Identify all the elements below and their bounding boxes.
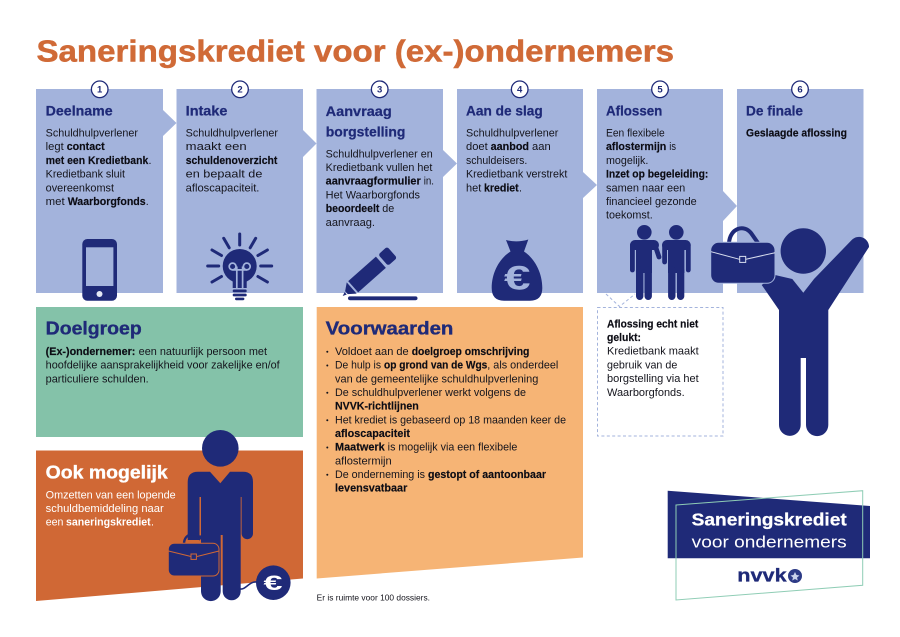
list: conditions: van de gemeentelijke schuldhulpverlening — [335, 373, 538, 385]
list: conditions: NVVK-richtlijnen — [335, 401, 419, 413]
icon: cheering person with briefcase — [711, 228, 869, 436]
text: step 3 description: Kredietbank vullen het — [326, 162, 432, 174]
panel: step 2 Intake — [176, 81, 316, 300]
text: step 4 description: aan — [532, 141, 551, 153]
text: Ook mogelijk description: Omzetten van een lopende — [46, 489, 176, 501]
text: step 2 description: Schuldhulpverlener — [186, 128, 278, 140]
callout: aflossing echt niet gelukt: gebruik van de — [607, 359, 677, 371]
panel: step 1 Deelname — [36, 81, 176, 301]
heading: De finale: De finale — [746, 103, 803, 119]
list: conditions: De schuldhulpverlener werkt volgens de — [335, 387, 526, 399]
text: step 3 description: Schuldhulpverlener en — [326, 148, 433, 160]
list: conditions: Het krediet is gebaseerd op 18 maanden keer de — [335, 414, 566, 426]
icon: smartphone — [82, 239, 117, 301]
heading: Aanvraag borgstelling: Aanvraag — [326, 103, 392, 119]
icon: money bag — [492, 240, 542, 301]
list: conditions: Voldoet aan de — [335, 346, 409, 358]
list: conditions: aflostermijn — [335, 455, 392, 467]
step number 2: 2 — [237, 85, 243, 96]
text: step 5 description: financieel gezonde — [606, 196, 697, 208]
text: step 5 description: Inzet op begeleiding: — [606, 169, 708, 181]
list: conditions — [326, 346, 566, 495]
text: Ook mogelijk description: . — [151, 517, 154, 529]
step number 6: 6 — [797, 85, 803, 96]
text: Doelgroep description: (Ex-)ondernemer: — [46, 346, 135, 358]
text: Doelgroep description: hoofdelijke aansprakelijkheid voor zakelijke en/of — [46, 360, 280, 372]
callout: aflossing echt niet gelukt: gelukt: — [607, 332, 641, 344]
text: step 4 description: het — [466, 182, 481, 194]
text: step 3 description: aanvraag. — [326, 217, 375, 229]
callout: aflossing echt niet gelukt: Kredietbank maakt — [607, 346, 699, 358]
step number 2 — [232, 81, 248, 98]
text: Ook mogelijk description — [46, 489, 176, 529]
panel: Voorwaarden — [317, 307, 583, 578]
step number 4 — [511, 81, 528, 98]
heading: Aanvraag borgstelling — [326, 103, 405, 140]
text: step 1 description: . — [148, 155, 151, 167]
panel: Ook mogelijk — [36, 430, 303, 601]
text: Ook mogelijk description: een — [46, 517, 63, 529]
panel: step 3 Aanvraag borgstelling — [316, 81, 457, 302]
callout: aflossing echt niet gelukt: borgstelling via het — [607, 373, 699, 385]
heading: Aan de slag: Aan de slag — [466, 103, 543, 119]
text: step 5 description: Een flexibele — [606, 128, 665, 140]
heading: Intake: Intake — [186, 103, 228, 119]
text: step 1 description: met — [46, 196, 65, 208]
text: step 4 description: Kredietbank verstrekt — [466, 169, 567, 181]
list: conditions: De onderneming is — [335, 469, 425, 481]
heading: Ook mogelijk: Ook mogelijk — [46, 461, 168, 482]
list: conditions: gestopt of aantoonbaar — [428, 469, 546, 481]
footnote: Er is ruimte voor 100 dossiers. — [317, 593, 430, 603]
icon: raised briefcase — [711, 228, 775, 283]
text: step 2 description: schuldenoverzicht — [186, 155, 278, 167]
text: step 3 description — [326, 148, 434, 229]
list: conditions: op grond van de Wgs — [384, 360, 487, 372]
text: step 1 description: contact — [67, 141, 105, 153]
text: Ook mogelijk description: saneringskrediet — [66, 517, 151, 529]
step number 6 — [792, 81, 808, 98]
text: Ook mogelijk description: schuldbemiddeling naar — [46, 503, 164, 515]
heading: Voorwaarden: Voorwaarden — [326, 317, 453, 338]
icon: money bag: € — [504, 260, 531, 298]
callout: aflossing echt niet gelukt: Aflossing echt niet — [607, 318, 699, 330]
icon: briefcase — [168, 534, 219, 576]
title: Saneringskrediet voor (ex-)ondernemers — [36, 35, 674, 69]
text: step 5 description: is — [669, 141, 676, 153]
text: step 1 description: legt — [46, 141, 64, 153]
text: Doelgroep description: een natuurlijk persoon met — [139, 346, 267, 358]
text: step 3 description: aanvraagformulier — [326, 176, 421, 188]
logo: Saneringskrediet voor ondernemers nvvk — [668, 491, 870, 600]
icon: chain and euro ball: € — [264, 572, 283, 595]
text: step 5 description: mogelijk. — [606, 155, 648, 167]
logo: Saneringskrediet voor ondernemers nvvk: nvvk — [737, 565, 787, 586]
text: step 2 description: afloscapaciteit. — [186, 182, 259, 194]
text: step 3 description: in. — [424, 176, 434, 188]
text: Doelgroep description: particuliere schulden. — [46, 373, 149, 385]
list: conditions: doelgroep omschrijving — [412, 346, 529, 358]
heading: Doelgroep: Doelgroep — [46, 317, 142, 338]
list: conditions: Maatwerk — [335, 442, 385, 454]
text: step 1 description — [46, 128, 151, 208]
text: step 2 description: en bepaalt de — [186, 169, 262, 181]
text: step 6 description: Geslaagde aflossing — [746, 128, 847, 140]
text: step 4 description: aanbod — [491, 141, 529, 153]
text: step 1 description: . — [146, 196, 149, 208]
text: step 1 description: Kredietbank sluit — [46, 169, 125, 181]
text: Doelgroep description — [46, 346, 280, 385]
logo: Saneringskrediet voor ondernemers nvvk: Saneringskrediet — [692, 510, 847, 530]
text: step 1 description: overeenkomst — [46, 182, 114, 194]
icon: chain and euro ball — [240, 565, 291, 600]
list: conditions: afloscapaciteit — [335, 428, 410, 440]
text: step 4 description: . — [519, 182, 522, 194]
step number 5 — [652, 81, 668, 98]
panel: step 4 Aan de slag — [457, 81, 597, 301]
text: step 5 description: aflostermijn — [606, 141, 666, 153]
text: step 4 description — [466, 128, 567, 194]
heading: Aanvraag borgstelling: borgstelling — [326, 124, 405, 140]
icon: pencil — [338, 247, 418, 302]
text: step 1 description: Waarborgfonds — [68, 196, 146, 208]
text: step 4 description: krediet — [484, 182, 519, 194]
callout: aflossing echt niet gelukt: Waarborgfonds. — [607, 387, 685, 399]
step number 1 — [91, 81, 108, 98]
text: step 2 description: maakt een — [186, 141, 247, 153]
text: step 1 description: met een Kredietbank — [46, 155, 148, 167]
list: conditions: levensvatbaar — [335, 483, 407, 495]
icon: nvvk emblem — [788, 569, 802, 583]
text: step 4 description: schuldeisers. — [466, 155, 527, 167]
list: conditions: is mogelijk via een flexibele — [388, 442, 517, 454]
panel: Doelgroep — [36, 307, 303, 437]
step number 1: 1 — [97, 85, 103, 96]
panel: step 6 De finale — [737, 81, 864, 293]
text: step 2 description — [186, 128, 278, 194]
step number 5: 5 — [657, 85, 663, 96]
text: step 3 description: Het Waarborgfonds — [326, 189, 420, 201]
text: step 5 description: toekomst. — [606, 210, 653, 222]
list: conditions: De hulp is — [335, 360, 381, 372]
callout: aflossing echt niet gelukt — [598, 294, 723, 436]
icon: two people — [630, 225, 691, 296]
text: step 3 description: de — [382, 203, 394, 215]
heading: Aflossen: Aflossen — [606, 103, 662, 119]
text: step 3 description: beoordeelt — [326, 203, 380, 215]
text: step 4 description: doet — [466, 141, 488, 153]
icon: person with briefcase and ball and chain — [168, 430, 291, 601]
list: conditions: , als onderdeel — [487, 360, 558, 372]
step number 4: 4 — [517, 85, 523, 96]
text: step 5 description: samen naar een — [606, 182, 685, 194]
panel: step 5 Aflossen — [597, 81, 737, 296]
heading: Deelname: Deelname — [46, 103, 113, 119]
text: step 4 description: Schuldhulpverlener — [466, 128, 559, 140]
step number 3 — [371, 81, 388, 98]
icon: light bulb — [208, 234, 272, 300]
step number 3: 3 — [377, 85, 382, 96]
logo: Saneringskrediet voor ondernemers nvvk: voor ondernemers — [692, 533, 847, 552]
text: step 1 description: Schuldhulpverlener — [46, 128, 138, 140]
text: step 5 description — [606, 128, 708, 222]
